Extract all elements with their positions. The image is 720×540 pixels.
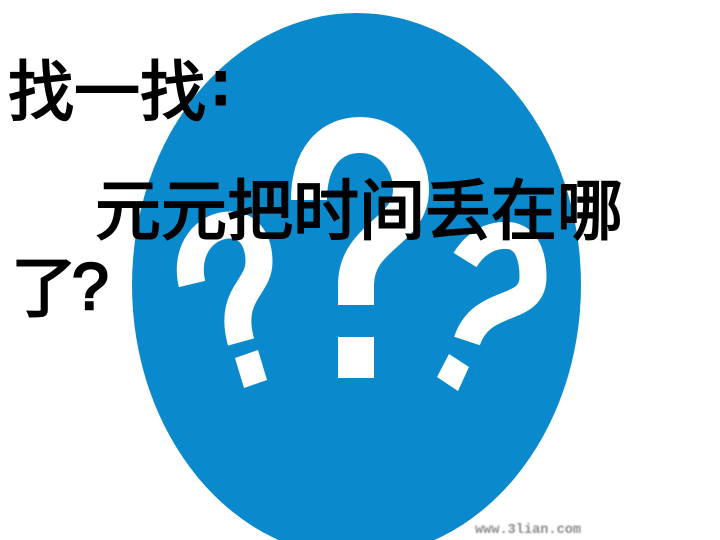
heading colon: :	[213, 52, 229, 115]
question mark glyph: ?	[72, 249, 109, 323]
text block: question line two: 了	[11, 251, 77, 325]
icon: large central question mark	[309, 135, 411, 378]
icon: left question mark	[190, 225, 267, 388]
blue ellipse	[132, 13, 581, 540]
text block: question line one: 元元把时间丢在哪	[95, 174, 623, 248]
icon: right question mark	[437, 235, 533, 391]
heading: find it: 找一找	[8, 55, 206, 129]
watermark: www.3lian.com	[475, 523, 581, 538]
